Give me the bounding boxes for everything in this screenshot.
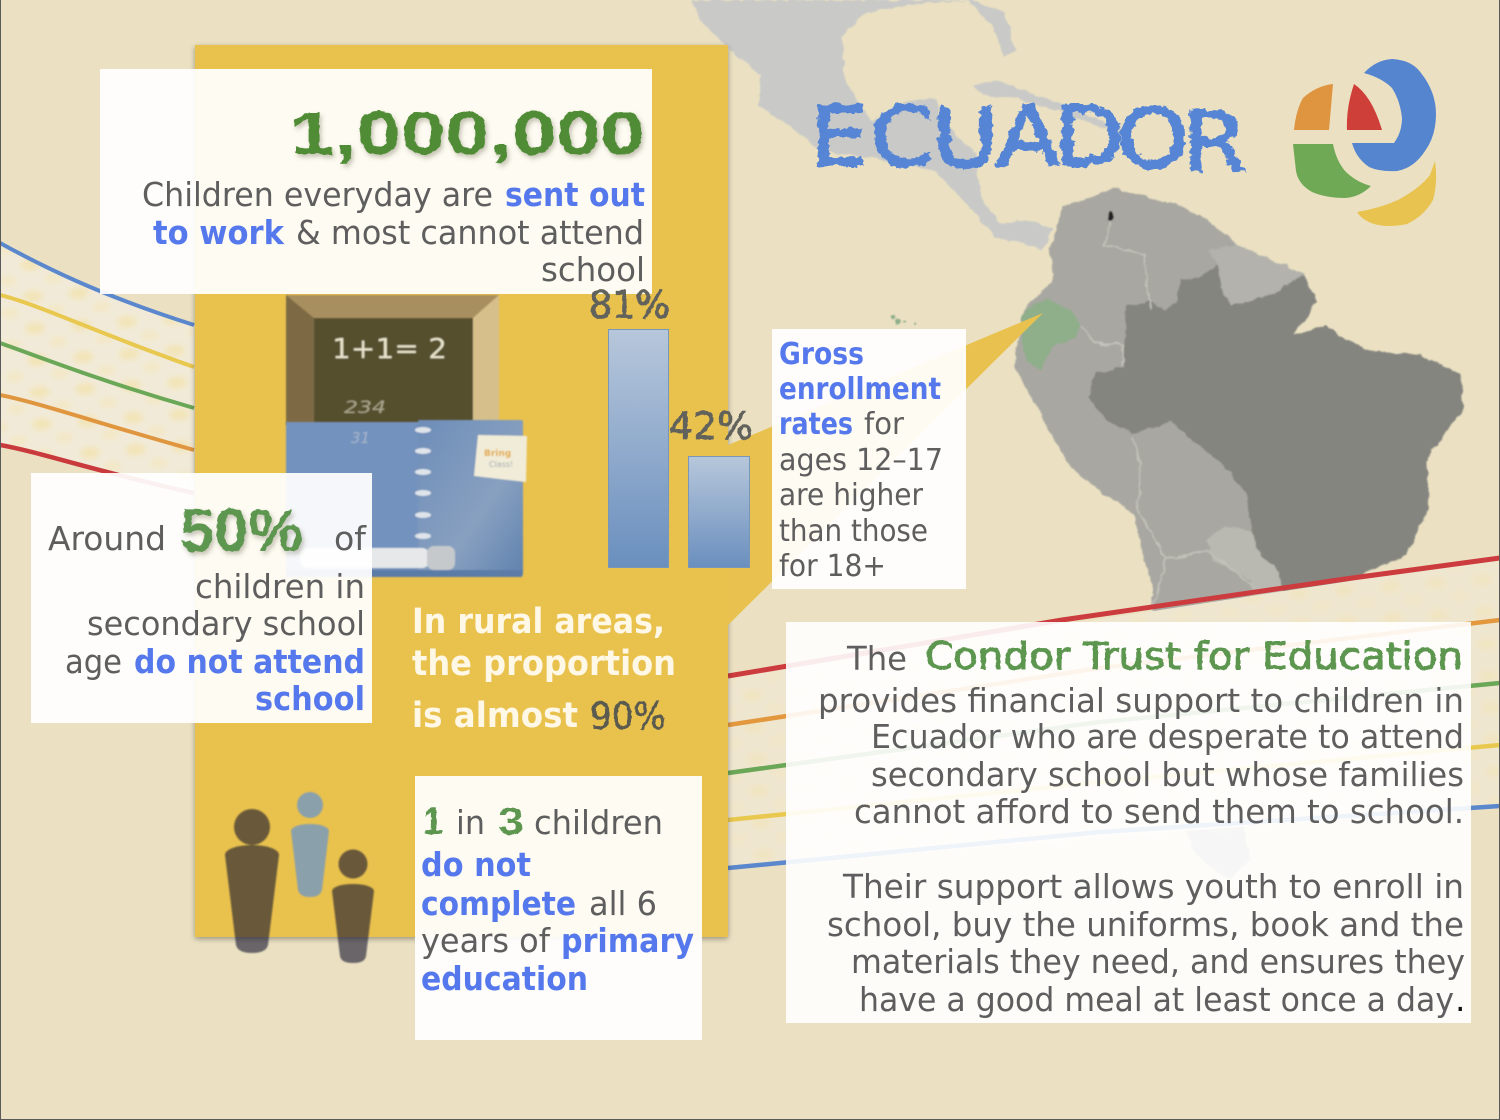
- text box: gross enrollment rates: ages 12–17: [779, 443, 943, 478]
- stat: 1: 1: [423, 801, 443, 843]
- chalk remainder: 31: [351, 429, 370, 447]
- map: Paraguay: [1208, 526, 1289, 612]
- map: lake Maracaibo: [1107, 211, 1113, 221]
- text box: around 50 percent: of: [334, 519, 367, 558]
- logo: yellow: [1357, 161, 1436, 226]
- text box: Condor Trust for Education: have a good meal at least once a day: [859, 980, 1454, 1019]
- text box: Condor Trust for Education: The: [846, 639, 907, 678]
- text box: Condor Trust for Education: Their support allows youth to enroll in: [842, 867, 1464, 906]
- sticky note: Bring: [484, 449, 511, 459]
- sentence: [142, 175, 645, 289]
- text box: Condor Trust for Education: materials they need, and ensures they: [851, 942, 1465, 981]
- text box: around 50 percent: children in: [195, 567, 365, 606]
- logo: blue: [1352, 59, 1436, 171]
- icon: blue notebook: [286, 420, 527, 577]
- text box: around 50 percent: secondary school: [87, 604, 365, 643]
- bar value: 81%: 81%: [589, 283, 670, 327]
- text box: gross enrollment rates: Gross: [779, 337, 864, 372]
- coloured lines band: right: [728, 558, 1500, 868]
- text box: gross enrollment rates: than those: [779, 514, 928, 549]
- text box: 1 in 3 children: [415, 776, 702, 1040]
- icon: three people: [225, 792, 374, 963]
- coloured lines band: left: [0, 243, 194, 493]
- text: rural areas: [412, 602, 676, 738]
- text box: Condor Trust for Education: Ecuador who are desperate to attend: [871, 717, 1464, 756]
- map: Ecuador: [1022, 300, 1080, 370]
- text box: one million children: [100, 69, 652, 294]
- callout pointer to Ecuador: [728, 313, 1043, 625]
- sentence: Children everyday are: [142, 175, 493, 214]
- text box: around 50 percent: Around: [48, 519, 166, 558]
- chalk equation: 1+1= 2: [332, 332, 447, 365]
- title: ECUADOR: [810, 89, 1247, 191]
- map: Mexico and Central America: [660, 0, 1053, 249]
- logo: red: [1347, 84, 1382, 130]
- map: Guianas: [1208, 245, 1303, 306]
- text: rural areas: is almost: [412, 696, 578, 736]
- person: faded child: [291, 792, 329, 897]
- sticky note: Class!: [489, 460, 513, 469]
- bar chart: enrollment rates: [608, 330, 753, 568]
- icon: chalkboard: [286, 295, 499, 425]
- text box: 1 in 3 children: primary: [561, 921, 694, 960]
- text box: gross enrollment rates: for: [864, 407, 905, 442]
- text box: 1 in 3 children: in: [456, 803, 485, 842]
- bar value: 42%: 42%: [669, 405, 753, 448]
- text: rural areas: In rural areas,: [412, 602, 665, 642]
- text box: Condor Trust for Education: cannot afford to send them to school.: [854, 792, 1464, 831]
- sticky note: [474, 435, 527, 482]
- text box: 1 in 3 children: years of: [421, 921, 551, 960]
- yellow main panel: [195, 45, 728, 937]
- text box: 1 in 3 children: do not: [421, 845, 531, 884]
- pen: [300, 546, 455, 570]
- text box: around 50 percent: school: [255, 679, 365, 718]
- map: country borders: [1081, 212, 1255, 612]
- sentence: school: [541, 250, 645, 289]
- chalk sum: 234: [344, 398, 386, 418]
- map: Galapagos islands: [890, 314, 916, 326]
- organisation name: Condor Trust for Education: [925, 635, 1463, 678]
- text box: gross enrollment rates: [772, 329, 966, 589]
- text box: 1 in 3 children: all 6: [589, 884, 657, 923]
- stat: 50%: 50%: [180, 497, 303, 564]
- text box: around 50 percent: [31, 473, 372, 723]
- text box: 1 in 3 children: education: [421, 959, 588, 998]
- text box: gross enrollment rates: for 18+: [779, 549, 886, 584]
- big number: 1,000,000: [290, 100, 645, 167]
- text box: Condor Trust for Education: provides financial support to children in: [818, 681, 1464, 720]
- map: Spanish-speaking South America: [1015, 188, 1345, 880]
- map: Brazil: [1088, 265, 1463, 660]
- map: Caribbean islands: [972, 82, 1125, 130]
- sentence: sent out: [505, 175, 645, 214]
- icon: logo: [1293, 59, 1436, 226]
- person: adult: [225, 809, 279, 953]
- notebook rings: [415, 427, 431, 539]
- text box: around 50 percent: age: [65, 642, 122, 681]
- text box: 1 in 3 children: complete: [421, 884, 576, 923]
- text box: gross enrollment rates: enrollment: [779, 372, 941, 407]
- sentence: & most cannot attend: [296, 213, 644, 252]
- stat: 90%: 90%: [590, 695, 666, 738]
- sentence: to work: [153, 213, 285, 252]
- bar: ages 18+: [688, 456, 750, 568]
- stat: 3: 3: [498, 801, 524, 843]
- map of Central and South America: [660, 0, 1463, 880]
- logo: green: [1293, 144, 1371, 198]
- bar: ages 12-17: [608, 330, 668, 568]
- person: child: [332, 850, 374, 963]
- text box: Condor Trust for Education: [786, 622, 1471, 1023]
- text: rural areas: the proportion: [412, 644, 676, 684]
- logo: orange: [1294, 84, 1333, 130]
- text box: Condor Trust for Education: school, buy the uniforms, book and the: [827, 905, 1464, 944]
- text box: Condor Trust for Education: .: [1455, 980, 1466, 1019]
- text box: gross enrollment rates: rates: [779, 407, 853, 442]
- text box: gross enrollment rates: are higher: [779, 478, 924, 513]
- text box: 1 in 3 children: children: [534, 803, 663, 842]
- text box: around 50 percent: do not attend: [134, 642, 365, 681]
- text box: Condor Trust for Education: secondary school but whose families: [871, 755, 1464, 794]
